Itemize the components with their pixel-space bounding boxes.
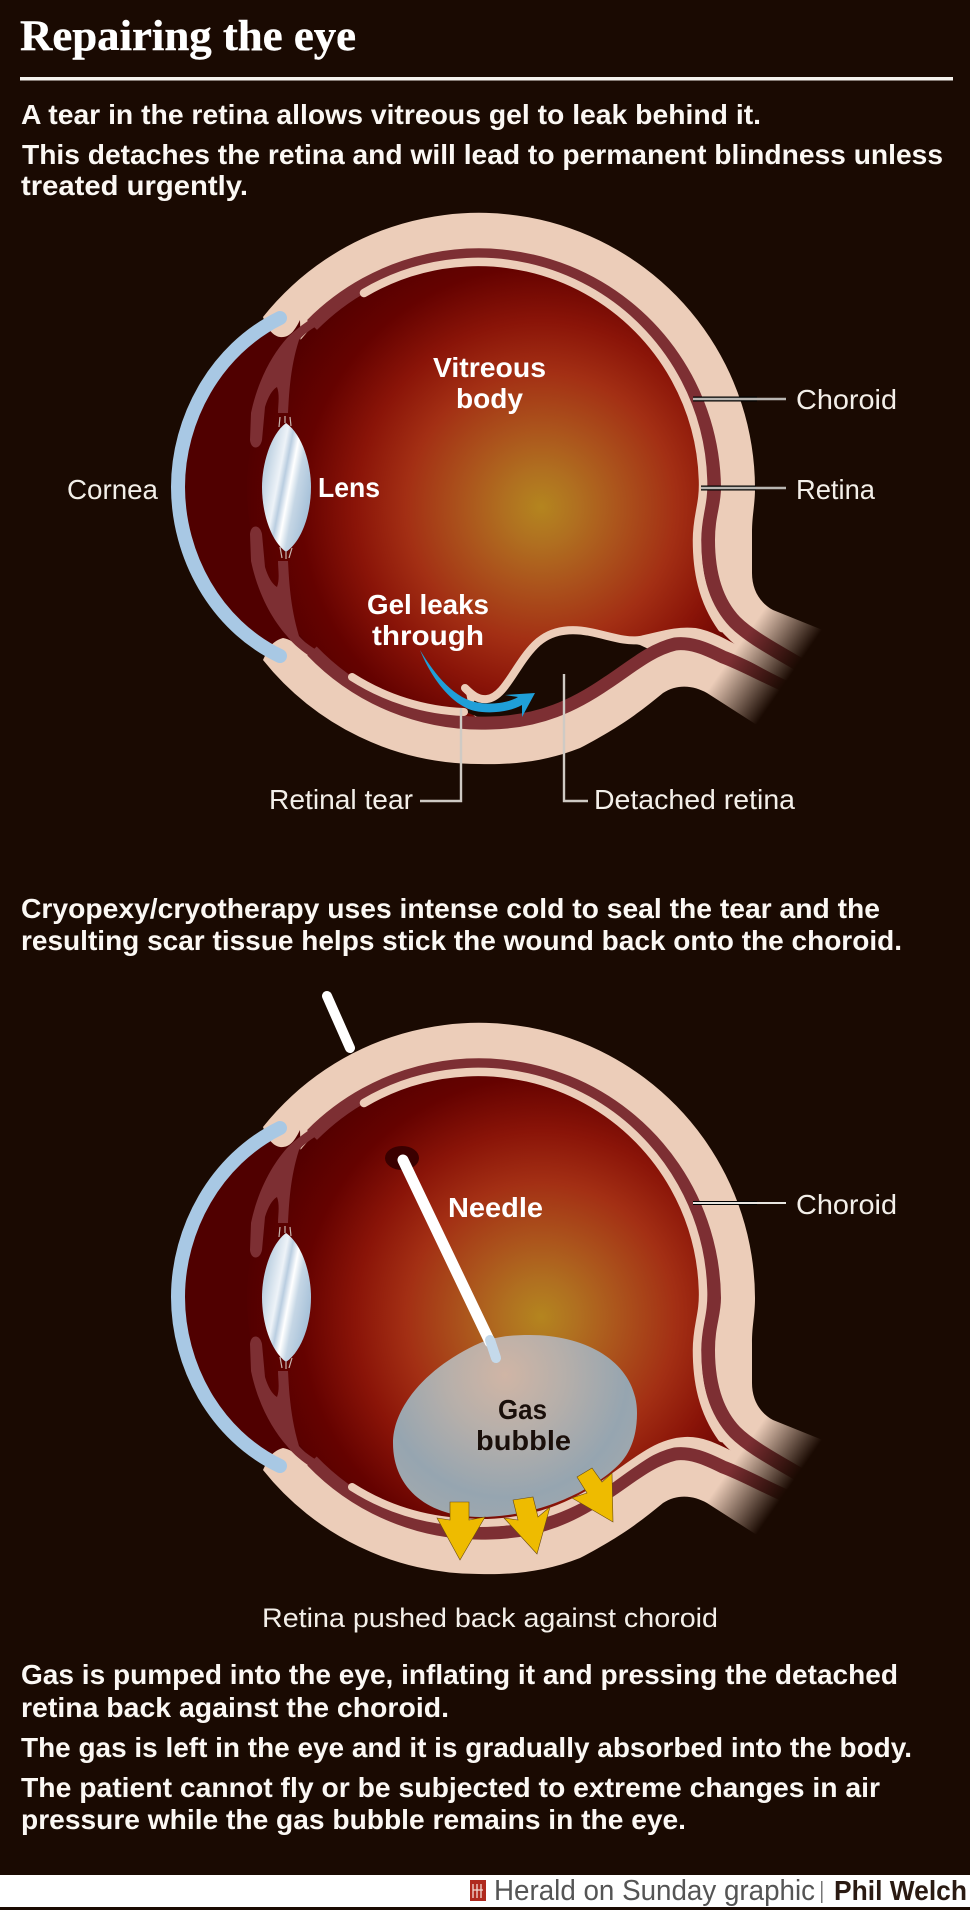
closing text: pressure while the gas bubble remains in the eye. <box>21 1804 686 1835</box>
eye diagram 2: gas bubble <box>178 1023 860 1580</box>
needle outside eye <box>327 996 350 1048</box>
cryopexy text: Cryopexy/cryotherapy uses intense cold to seal the tear and the <box>21 893 880 924</box>
footer credit bar <box>0 1875 970 1907</box>
intro text <box>21 99 943 201</box>
leader and label: retina: Retina <box>796 474 875 505</box>
logo <box>470 1880 486 1901</box>
closing text: The patient cannot fly or be subjected to extreme changes in air <box>21 1772 880 1803</box>
lens <box>262 1226 311 1369</box>
label: gas bubble <box>476 1394 571 1456</box>
cryopexy text: resulting scar tissue helps stick the wound back onto the choroid. <box>21 925 902 956</box>
choroid <box>250 255 800 723</box>
label: gel leaks through: Gel leaks <box>367 589 489 620</box>
retina <box>352 1072 795 1522</box>
title: Repairing the eye <box>20 13 356 60</box>
leader and label: retinal tear <box>269 708 461 815</box>
label: gas bubble: Gas <box>498 1394 547 1425</box>
retina <box>352 262 795 712</box>
reattached retina <box>460 1441 795 1523</box>
arrow: gel leak <box>420 650 535 717</box>
vitreous body <box>247 256 745 720</box>
yellow arrows <box>437 1468 613 1560</box>
leader and label: choroid: Choroid <box>796 1189 897 1220</box>
label: vitreous body <box>433 352 546 414</box>
anterior chamber <box>178 1128 360 1466</box>
label: lens: Lens <box>318 472 380 503</box>
sclera <box>263 1023 830 1574</box>
leader and label: detached retina: Detached retina <box>594 784 795 815</box>
choroid <box>250 1065 800 1533</box>
anterior chamber <box>178 318 360 656</box>
eye diagram 1: detached retina <box>178 213 860 770</box>
needle entry point <box>385 1146 419 1170</box>
label: gel leaks through: through <box>372 620 484 651</box>
intro text: This detaches the retina and will lead to permanent blindness unless <box>22 139 943 170</box>
closing text: The gas is left in the eye and it is gradually absorbed into the body. <box>21 1732 912 1763</box>
leader and label: choroid: Choroid <box>796 384 897 415</box>
gas bubble <box>393 1335 637 1517</box>
intro text: A tear in the retina allows vitreous gel to leak behind it. <box>21 99 761 130</box>
label: needle: Needle <box>448 1192 543 1223</box>
leader and label: detached retina <box>564 674 795 815</box>
caption: retina pushed back: Retina pushed back against choroid <box>262 1603 718 1633</box>
vitreous body <box>247 1066 745 1530</box>
label: gas bubble: bubble <box>476 1425 571 1456</box>
optic nerve fade <box>690 1400 860 1580</box>
closing text: retina back against the choroid. <box>21 1692 449 1723</box>
cornea <box>178 1128 280 1466</box>
leader and label: retinal tear: Retinal tear <box>269 784 413 815</box>
cryopexy text <box>21 893 902 956</box>
label: vitreous body: Vitreous <box>433 352 546 383</box>
lens <box>262 416 311 559</box>
detached retina <box>465 630 795 699</box>
optic nerve fade <box>690 590 860 770</box>
gap behind detached retina <box>466 630 655 722</box>
label: vitreous body: body <box>456 383 523 414</box>
credit text: Herald on Sunday graphic <box>494 1875 815 1907</box>
sclera <box>263 213 830 764</box>
intro text: treated urgently. <box>21 170 248 201</box>
closing text: Gas is pumped into the eye, inflating it and pressing the detached <box>21 1659 898 1690</box>
label: cornea: Cornea <box>67 474 158 505</box>
needle inside eye <box>403 1160 496 1358</box>
label: gel leaks through <box>367 589 489 651</box>
closing text <box>21 1659 912 1835</box>
cornea <box>178 318 280 656</box>
